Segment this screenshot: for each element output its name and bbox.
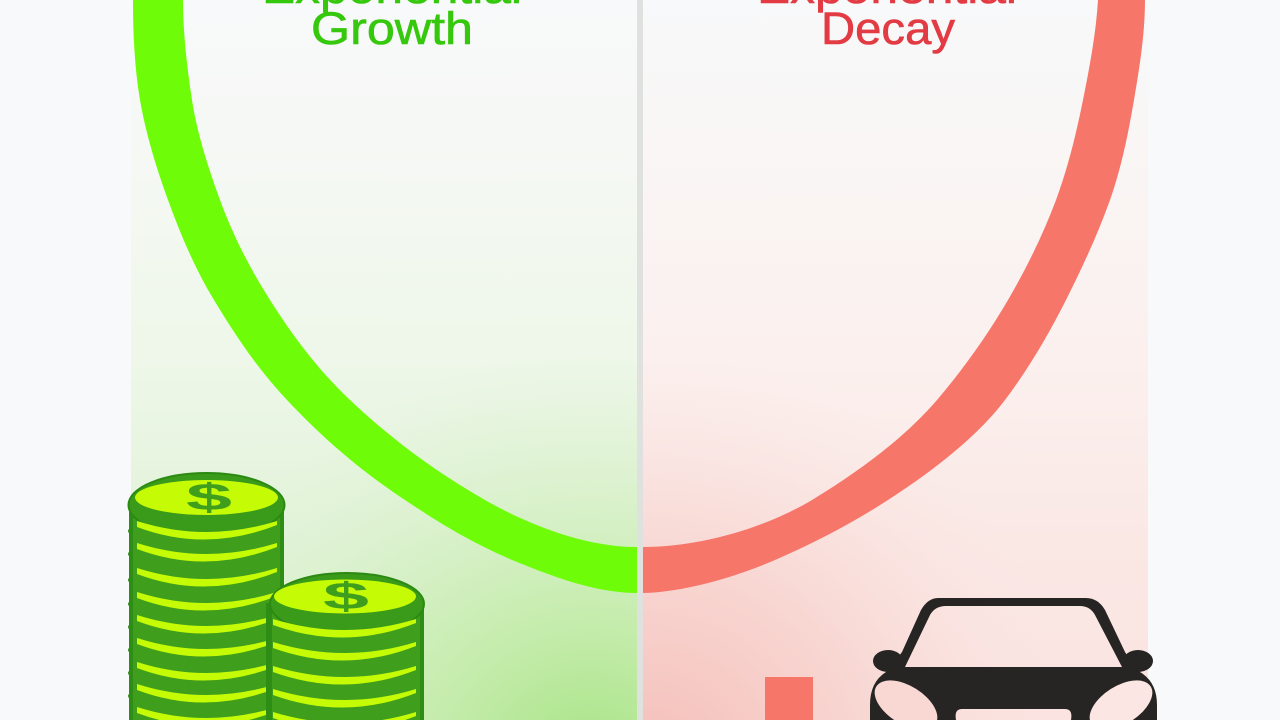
left headlight [866,670,946,720]
left mirror [873,650,903,672]
heading: exponential decay: Decay [821,3,956,54]
icon: short coin stack [266,573,424,720]
heading: exponential growth: Growth [311,3,473,54]
decay curve [643,0,1145,593]
icon: tall coin stack [128,473,284,720]
top coin dollar sign: $ [323,576,369,618]
car body with windshield and grille openings [870,598,1157,720]
right mirror [1123,650,1153,672]
right headlight [1081,670,1161,720]
decay bar [765,677,813,720]
top coin dollar sign: $ [186,477,232,519]
coin edge stripes [137,521,277,720]
heading: exponential decay [757,0,1017,54]
growth curve [133,0,637,593]
coin edge stripes [273,619,416,720]
panel: exponential decay [643,0,1148,720]
panel: exponential growth [131,0,637,720]
center divider [637,0,643,720]
icon: car [866,598,1161,720]
heading: exponential growth [262,0,522,54]
